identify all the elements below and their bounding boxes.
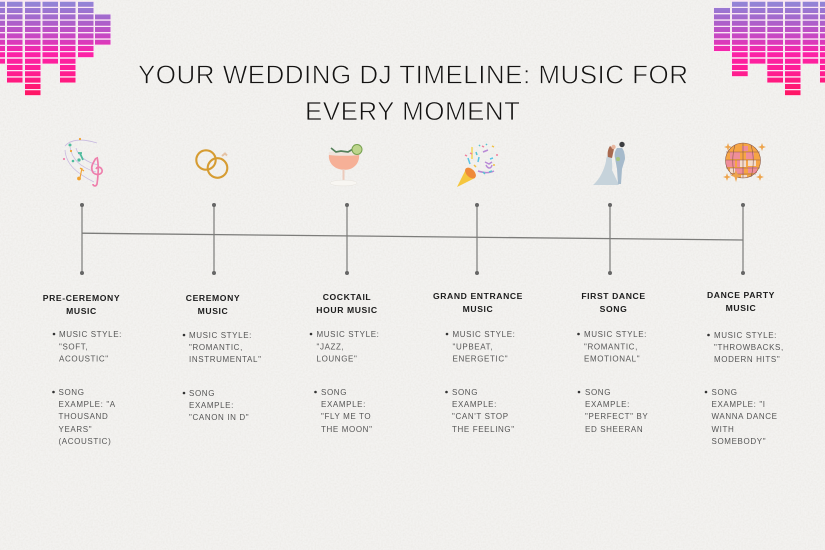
- column: ceremony music: "CANON IN D": [189, 413, 249, 422]
- column: pre-ceremony music: [43, 293, 122, 446]
- column: dance party music: MODERN HITS": [714, 355, 780, 364]
- column: first dance song: [577, 291, 648, 434]
- column: dance party music: "THROWBACKS,: [714, 343, 784, 352]
- column: grand entrance music: EXAMPLE:: [452, 400, 497, 409]
- column: cocktail hour music: THE MOON": [321, 425, 373, 434]
- column: pre-ceremony music: (ACOUSTIC): [58, 437, 111, 446]
- icon: cocktail glass: [329, 144, 362, 186]
- icon: disco ball: [723, 143, 766, 182]
- column: first dance song: SONG: [585, 388, 611, 397]
- column: cocktail hour music: MUSIC STYLE:: [316, 330, 380, 339]
- column: first dance song: MUSIC STYLE:: [584, 330, 647, 339]
- column: first dance song: SONG: [600, 304, 627, 314]
- column: grand entrance music: SONG: [452, 388, 478, 397]
- column: ceremony music: EXAMPLE:: [189, 401, 234, 410]
- title: EVERY MOMENT: [305, 96, 520, 126]
- title: YOUR WEDDING DJ TIMELINE: MUSIC FOR: [138, 60, 688, 90]
- title: [138, 60, 688, 126]
- column: ceremony music: INSTRUMENTAL": [189, 355, 262, 364]
- column: pre-ceremony music: THOUSAND: [58, 412, 108, 421]
- column: first dance song: ED SHEERAN: [585, 425, 643, 434]
- column: dance party music: MUSIC: [726, 303, 756, 313]
- column: dance party music: MUSIC STYLE:: [714, 331, 777, 340]
- timeline: [80, 203, 745, 275]
- column: ceremony music: "ROMANTIC,: [189, 343, 243, 352]
- column: grand entrance music: MUSIC STYLE:: [452, 330, 516, 339]
- column: dance party music: EXAMPLE: "I: [712, 400, 766, 409]
- column: dance party music: SOMEBODY": [712, 437, 766, 446]
- column: ceremony music: MUSIC STYLE:: [189, 331, 252, 340]
- column: first dance song: "ROMANTIC,: [584, 342, 638, 352]
- column: pre-ceremony music: SONG: [58, 388, 85, 397]
- column: grand entrance music: "UPBEAT,: [452, 342, 493, 352]
- column: first dance song: EMOTIONAL": [584, 354, 640, 364]
- icon: first dance couple: [593, 142, 625, 185]
- column: first dance song: FIRST DANCE: [581, 291, 646, 301]
- column: grand entrance music: [433, 291, 523, 434]
- column: cocktail hour music: EXAMPLE:: [321, 400, 366, 409]
- column: cocktail hour music: SONG: [321, 388, 347, 397]
- column: pre-ceremony music: ACOUSTIC": [59, 354, 109, 364]
- column: cocktail hour music: [310, 292, 380, 434]
- icon: party popper: [457, 144, 498, 187]
- column: cocktail hour music: COCKTAIL: [323, 292, 371, 302]
- column: grand entrance music: ENERGETIC": [452, 354, 508, 364]
- column: first dance song: "PERFECT" BY: [585, 412, 648, 421]
- column: dance party music: SONG: [712, 388, 738, 397]
- column: ceremony music: MUSIC: [198, 306, 228, 316]
- column: grand entrance music: GRAND ENTRANCE: [433, 291, 523, 301]
- column: cocktail hour music: "JAZZ,: [316, 342, 344, 352]
- column: pre-ceremony music: MUSIC STYLE:: [59, 330, 122, 339]
- equalizer graphic: top right: [713, 0, 825, 96]
- column: cocktail hour music: "FLY ME TO: [321, 412, 371, 421]
- column: cocktail hour music: LOUNGE": [316, 354, 357, 364]
- column: dance party music: DANCE PARTY: [707, 290, 775, 300]
- column: pre-ceremony music: EXAMPLE: "A: [58, 400, 116, 409]
- column: ceremony music: SONG: [189, 389, 215, 398]
- column: pre-ceremony music: YEARS": [58, 425, 92, 434]
- column: dance party music: WANNA DANCE: [712, 412, 778, 421]
- column: dance party music: [705, 290, 784, 446]
- column: ceremony music: [183, 293, 262, 422]
- column: pre-ceremony music: "SOFT,: [59, 342, 88, 352]
- column: pre-ceremony music: MUSIC: [66, 306, 97, 316]
- equalizer graphic: top left: [0, 0, 111, 96]
- column: cocktail hour music: HOUR MUSIC: [316, 305, 378, 315]
- column: pre-ceremony music: PRE-CEREMONY: [43, 293, 120, 303]
- column: grand entrance music: MUSIC: [463, 304, 493, 314]
- column: grand entrance music: THE FEELING": [452, 425, 515, 434]
- column: ceremony music: CEREMONY: [186, 293, 240, 303]
- column: dance party music: WITH: [712, 425, 734, 434]
- icon: wedding rings: [196, 150, 227, 178]
- icon: music notes and treble clef: [63, 138, 102, 186]
- column: first dance song: EXAMPLE:: [585, 400, 630, 409]
- column: grand entrance music: "CAN'T STOP: [452, 412, 509, 421]
